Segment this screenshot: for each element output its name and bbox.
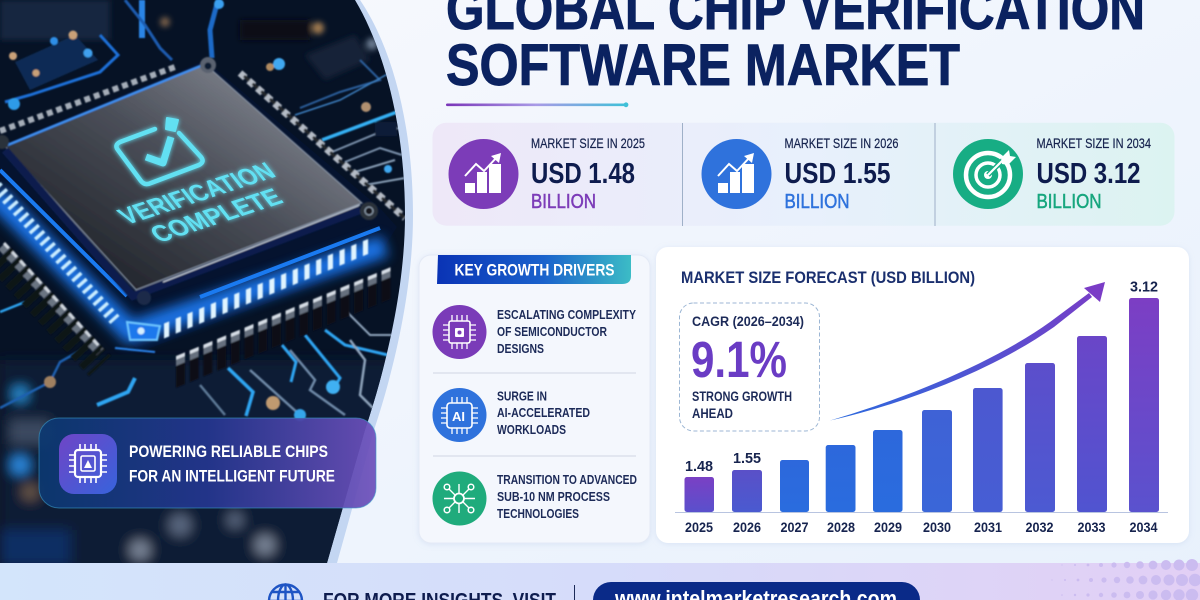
stat: 2026: MARKET SIZE IN 2026 — [784, 136, 898, 151]
CAGR callout: 9.1% — [691, 331, 787, 388]
icon: target — [953, 139, 1023, 209]
year labels: 2026 — [733, 519, 761, 535]
driver: process technologies — [432, 472, 637, 526]
callout text: FOR AN INTELLIGENT FUTURE — [129, 466, 335, 486]
callout: powering reliable chips — [39, 418, 376, 508]
chip label: COMPLETE — [145, 184, 288, 248]
growth arrow — [830, 282, 1105, 420]
pins lower left — [0, 243, 102, 366]
stat: 2025: MARKET SIZE IN 2025 — [531, 136, 645, 151]
panel: market size stats — [432, 123, 1174, 226]
stat: 2025: USD 1.48 — [531, 158, 635, 190]
LED strip lower right — [164, 245, 372, 331]
year labels: 2030 — [923, 519, 951, 535]
bars — [684, 298, 1159, 512]
icon: chip badge — [59, 434, 117, 494]
icon: growth chart blue — [702, 139, 772, 209]
year labels — [685, 519, 1158, 535]
small component top left — [5, 0, 285, 110]
driver: AI workloads — [432, 388, 590, 442]
stat: 2034: USD 3.12 — [1036, 158, 1140, 190]
chip rim — [0, 170, 380, 297]
driver: semiconductor complexity: DESIGNS — [497, 342, 544, 356]
driver: process technologies: SUB-10 NM PROCESS — [497, 490, 610, 504]
icon: verification checkbox — [116, 118, 203, 184]
stat: 2034 — [953, 136, 1151, 213]
icon: growth chart purple — [448, 139, 518, 209]
icon: network node — [432, 472, 486, 526]
driver: AI workloads: AI-ACCELERATED — [497, 406, 590, 420]
right traces — [295, 60, 405, 185]
bar value labels — [685, 280, 1158, 475]
stat: 2026: USD 1.55 — [784, 158, 890, 190]
CAGR callout — [680, 303, 820, 431]
icon: AI chip — [432, 388, 486, 442]
panel: market size forecast chart — [656, 247, 1189, 543]
title underline — [446, 102, 628, 107]
driver: AI workloads: WORKLOADS — [497, 423, 566, 437]
driver: AI workloads: SURGE IN — [497, 390, 547, 404]
year labels: 2031 — [974, 519, 1002, 535]
year labels: 2032 — [1026, 519, 1054, 535]
driver: semiconductor complexity — [432, 305, 637, 359]
driver: semiconductor complexity: ESCALATING COMPLEXITY — [497, 308, 637, 322]
bottom traces — [0, 302, 392, 421]
halftone dots — [1051, 559, 1200, 600]
bar value labels: 1.55 — [733, 451, 761, 467]
icon: chip — [432, 305, 486, 359]
callout text: POWERING RELIABLE CHIPS — [129, 442, 328, 461]
bar value labels: 1.48 — [685, 459, 713, 475]
driver: process technologies: TECHNOLOGIES — [497, 507, 579, 521]
drivers header: KEY GROWTH DRIVERS — [454, 262, 614, 280]
chip corner LED tab — [115, 322, 160, 352]
title — [446, 0, 1145, 98]
driver: process technologies: TRANSITION TO ADVANCED — [497, 473, 637, 487]
stat: 2034: BILLION — [1036, 191, 1102, 213]
year labels: 2033 — [1078, 519, 1106, 535]
footer band — [0, 559, 1200, 600]
driver: semiconductor complexity: OF SEMICONDUCTOR — [497, 325, 607, 339]
stat: 2026: BILLION — [784, 191, 850, 213]
chip body — [0, 60, 397, 352]
callout text — [129, 442, 335, 486]
CAGR callout: STRONG GROWTH — [692, 389, 792, 404]
bar value labels: 3.12 — [1130, 280, 1158, 296]
year labels: 2028 — [827, 519, 855, 535]
stat: 2025: BILLION — [531, 191, 596, 213]
chart title: MARKET SIZE FORECAST (USD BILLION) — [681, 268, 975, 287]
CAGR callout: AHEAD — [692, 406, 733, 421]
chip label: VERIFICATION — [113, 158, 281, 230]
stat: 2025 — [448, 136, 645, 213]
chip top face — [0, 57, 378, 305]
year labels: 2027 — [780, 519, 809, 535]
year labels: 2025 — [685, 519, 713, 535]
title: SOFTWARE MARKET — [446, 33, 960, 98]
hero image: circuit board with chip — [0, 0, 420, 570]
year labels: 2029 — [874, 519, 902, 535]
drivers header — [437, 255, 631, 284]
stat: 2026 — [702, 136, 898, 213]
stat: 2034: MARKET SIZE IN 2034 — [1036, 136, 1151, 151]
hero band edge — [0, 0, 413, 563]
lower blurred board — [0, 360, 400, 570]
panel: key growth drivers — [419, 255, 650, 543]
CAGR callout: CAGR (2026–2034) — [692, 314, 804, 329]
icon: AI chip: AI — [452, 409, 465, 424]
beaded pins along top edges — [0, 67, 408, 221]
LED strip lower left — [0, 186, 115, 320]
upper blurred components — [0, 0, 378, 80]
LED glow — [0, 195, 385, 332]
year labels: 2034 — [1130, 519, 1158, 535]
pins lower right — [176, 269, 391, 372]
icon: globe — [269, 584, 302, 600]
